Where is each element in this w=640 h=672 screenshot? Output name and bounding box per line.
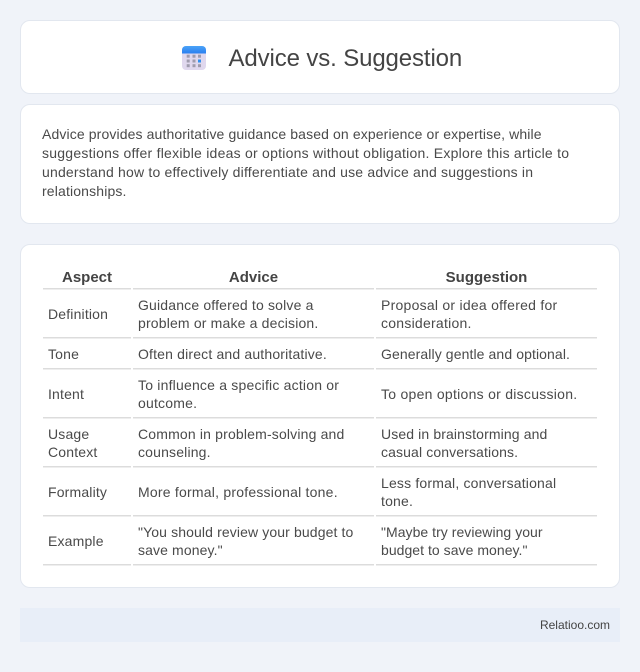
intro text: suggestions offer flexible ideas or options without obligation. Explore this article to	[42, 145, 569, 161]
row: usage context: Used in brainstorming and	[381, 426, 547, 442]
row: example: budget to save money."	[381, 542, 527, 558]
row: tone: Often direct and authoritative.	[138, 346, 327, 362]
comparison table	[43, 269, 597, 566]
row: definition: Proposal or idea offered for	[381, 297, 557, 313]
row: example: save money."	[138, 542, 223, 558]
row: definition: consideration.	[381, 315, 472, 331]
row: intent: To influence a specific action or	[138, 377, 339, 393]
row: intent: Intent	[48, 386, 84, 402]
intro text: Advice provides authoritative guidance based on experience or expertise, while	[42, 126, 542, 142]
row: usage context: Context	[48, 444, 97, 460]
intro text: relationships.	[42, 183, 127, 199]
row: usage context: casual conversations.	[381, 444, 518, 460]
row: formality: Less formal, conversational	[381, 475, 556, 491]
header row: Suggestion	[446, 269, 527, 286]
header row: Aspect	[62, 269, 112, 286]
row: definition: Guidance offered to solve a	[138, 297, 314, 313]
row: usage context: counseling.	[138, 444, 211, 460]
row: formality	[43, 475, 597, 517]
row: example: Example	[48, 533, 104, 549]
row: usage context: Common in problem-solving and	[138, 426, 344, 442]
row: usage context	[43, 426, 597, 468]
row: formality: tone.	[381, 493, 413, 509]
row: example: "You should review your budget to	[138, 524, 353, 540]
row: definition: Definition	[48, 306, 108, 322]
row: example: "Maybe try reviewing your	[381, 524, 543, 540]
row: tone: Generally gentle and optional.	[381, 346, 570, 362]
icon: calendar	[182, 46, 206, 70]
row: usage context: Usage	[48, 426, 89, 442]
title: Advice vs. Suggestion	[228, 45, 462, 72]
row: tone	[43, 346, 597, 370]
panel: comparison table	[20, 244, 620, 588]
header row: Advice	[229, 269, 278, 286]
row: intent	[43, 377, 597, 419]
panel: title card	[20, 20, 620, 94]
panel: introduction	[20, 104, 620, 224]
row: tone: Tone	[48, 346, 79, 362]
footer	[20, 608, 620, 642]
header row	[43, 269, 597, 290]
row: intent: outcome.	[138, 395, 197, 411]
footer credit: Relatioo.com	[540, 618, 610, 632]
row: example	[43, 524, 597, 566]
row: intent: To open options or discussion.	[381, 386, 577, 402]
row: definition	[43, 297, 597, 339]
row: formality: More formal, professional tone.	[138, 484, 338, 500]
row: definition: problem or make a decision.	[138, 315, 318, 331]
intro text: understand how to effectively differentiate and use advice and suggestions in	[42, 164, 533, 180]
row: formality: Formality	[48, 484, 107, 500]
intro text	[42, 126, 569, 199]
